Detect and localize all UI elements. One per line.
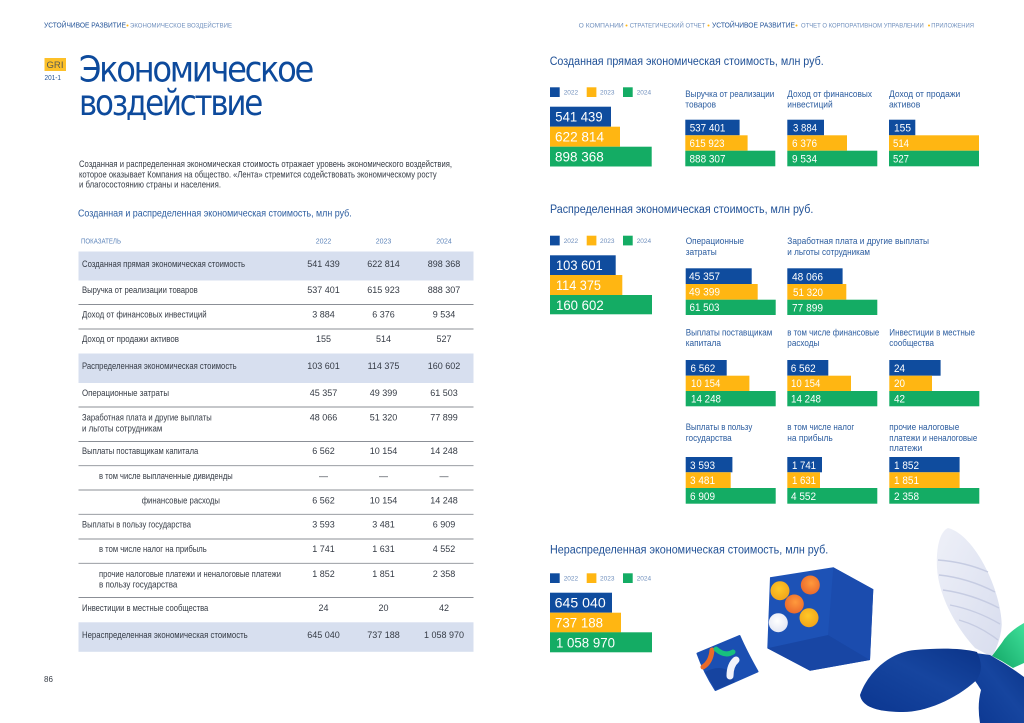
row: financial costs: 10 154 — [370, 496, 397, 506]
bar chart: community investment — [889, 328, 979, 406]
bar chart: revenue — [685, 89, 775, 166]
bar chart: other taxes: платежи — [889, 443, 922, 453]
row: revenue — [78, 285, 474, 304]
row: financial costs: 14 248 — [430, 496, 458, 506]
table header: 2023 — [376, 238, 391, 246]
intro paragraph: которое оказывает Компания на общество. «Лента» стремится содействовать экономическому росту — [79, 169, 437, 179]
bar chart: profit tax: 1 741 — [792, 460, 816, 472]
bar chart: state payments: 3 481 — [690, 475, 715, 487]
intro paragraph: Созданная и распределенная экономическая стоимость отражает уровень экономического воздействия, — [79, 159, 452, 169]
legend: retained value: 2023 — [600, 576, 615, 582]
bar chart: capital providers: Выплаты поставщикам — [686, 328, 772, 338]
bar chart: other taxes: 1 852 — [894, 460, 919, 472]
row: distributed value: Распределенная экономическая стоимость — [82, 361, 237, 371]
bar chart: direct value total: 622 814 — [555, 129, 604, 145]
page number: 86 — [44, 675, 53, 684]
row: asset sales — [82, 334, 452, 344]
bar chart: retained total: 645 040 — [555, 594, 606, 610]
right navigation: СТРАТЕГИЧЕСКИЙ ОТЧЕТ — [630, 20, 705, 30]
row: wages: 51 320 — [370, 413, 397, 423]
bar chart: community investment: 24 — [894, 363, 905, 375]
bar chart: other taxes: 2 358 — [894, 491, 919, 503]
row: revenue: Выручка от реализации товаров — [82, 285, 198, 295]
illustration: large cube with balls — [767, 567, 873, 671]
section heading: direct value: Созданная прямая экономическая стоимость, млн руб. — [550, 56, 824, 68]
row: financial income — [78, 310, 474, 329]
row: other taxes: 1 852 — [312, 569, 335, 579]
row: financial costs: финансовые расходы — [142, 496, 220, 506]
bar chart: financial costs: 6 562 — [791, 363, 816, 375]
bar chart: community investment: 42 — [894, 394, 905, 406]
row: dividends: — — [379, 471, 388, 481]
row: operating costs: Операционные затраты — [82, 388, 169, 398]
legend: retained value: 2022 — [564, 576, 579, 582]
row: dividends: — — [440, 471, 448, 481]
left breadcrumb — [44, 20, 233, 30]
row: community investment — [82, 603, 449, 613]
bar chart: financial costs — [787, 328, 879, 406]
row: dividends: в том числе выплаченные дивиденды — [99, 471, 233, 481]
row: asset sales: 155 — [316, 334, 331, 344]
row: community investment: Инвестиции в местные сообщества — [82, 603, 208, 613]
GRI badge — [44, 58, 66, 82]
bar chart: operating costs: 61 503 — [690, 302, 720, 314]
row: revenue: 537 401 — [307, 285, 340, 295]
row: profit tax: 4 552 — [433, 544, 455, 554]
row: retained value: 1 058 970 — [424, 630, 464, 640]
row: community investment: 20 — [378, 603, 389, 613]
row: wages — [78, 413, 474, 442]
bar chart: capital providers — [686, 328, 776, 406]
table — [78, 238, 474, 652]
table header — [81, 238, 452, 246]
bar chart: financial costs: расходы — [787, 338, 819, 348]
row: profit tax: в том числе налог на прибыль — [99, 544, 207, 554]
bar chart: state payments: государства — [686, 433, 732, 443]
row: financial income: 3 884 — [312, 310, 335, 320]
legend: retained value — [550, 573, 652, 583]
bar chart: asset sales: Доход от продажи — [889, 89, 960, 99]
bar chart: operating costs: 45 357 — [689, 271, 720, 283]
intro paragraph: и благосостоянию страны и населения. — [79, 179, 221, 189]
balls — [769, 576, 820, 632]
bar chart: financial income — [787, 89, 877, 166]
row: wages: и льготы сотрудникам — [82, 424, 162, 434]
GRI badge: GRI — [46, 60, 64, 71]
title: воздействие — [79, 83, 262, 124]
row: direct value: Созданная прямая экономическая стоимость — [82, 259, 245, 269]
row: revenue: 615 923 — [367, 285, 400, 295]
bar chart: financial income: Доход от финансовых — [787, 89, 872, 99]
row: operating costs: 61 503 — [430, 388, 458, 398]
bar chart: asset sales: 155 — [894, 122, 911, 134]
bar chart: asset sales: активов — [889, 99, 920, 109]
bar chart: state payments — [686, 422, 776, 504]
blue petal right — [968, 652, 1024, 723]
row: financial income: 9 534 — [433, 310, 455, 320]
bar chart: community investment: Инвестиции в местные — [889, 328, 975, 338]
bar chart: profit tax — [787, 422, 877, 504]
bar chart: capital providers: 6 562 — [690, 363, 715, 375]
row: distributed value: 114 375 — [368, 361, 399, 371]
row: asset sales: 527 — [436, 334, 452, 344]
row: other taxes: 2 358 — [433, 569, 455, 579]
bar chart: financial costs: 10 154 — [791, 378, 820, 390]
row: financial costs — [78, 496, 474, 514]
bar chart: asset sales: 514 — [893, 138, 909, 150]
legend: direct value — [550, 87, 652, 97]
bar chart: wages: 77 899 — [792, 303, 823, 315]
table heading: Созданная и распределенная экономическая стоимость, млн руб. — [78, 208, 352, 220]
bar chart: state payments: 6 909 — [690, 491, 715, 503]
row: state payments: 3 481 — [372, 520, 395, 530]
table header: 2022 — [316, 238, 331, 246]
row: state payments: 3 593 — [312, 520, 335, 530]
row: dividends — [78, 471, 474, 490]
row: financial costs: 6 562 — [312, 496, 335, 506]
row: direct value: 541 439 — [307, 259, 340, 269]
legend: distributed value: 2023 — [600, 238, 615, 245]
bar chart: financial income: 3 884 — [793, 122, 817, 134]
bar chart: operating costs: 49 399 — [689, 287, 720, 299]
row: other taxes — [78, 569, 474, 598]
bar chart: distributed total: 160 602 — [556, 297, 604, 313]
bar chart: wages: и льготы сотрудникам — [787, 247, 870, 257]
row: operating costs: 45 357 — [310, 388, 337, 398]
bar chart: wages: 48 066 — [792, 272, 823, 284]
row: other taxes: 1 851 — [372, 569, 395, 579]
row: distributed value: 160 602 — [428, 361, 460, 371]
row: asset sales: Доход от продажи активов — [82, 334, 179, 344]
row: state payments — [78, 520, 474, 539]
bar chart: other taxes: прочие налоговые — [889, 422, 959, 432]
bar chart: retained total: 1 058 970 — [556, 634, 615, 650]
bar chart: financial income: инвестиций — [787, 99, 833, 109]
row: state payments: Выплаты в пользу государства — [82, 520, 191, 530]
bar chart: state payments: 3 593 — [690, 460, 715, 472]
bar chart: operating costs: затраты — [686, 247, 717, 257]
blue petal left — [860, 649, 981, 712]
table header: ПОКАЗАТЕЛЬ — [81, 238, 121, 246]
right navigation — [579, 20, 974, 30]
bar chart: community investment: сообщества — [889, 338, 934, 348]
row: capital providers — [78, 446, 474, 466]
intro paragraph — [79, 159, 452, 189]
row: operating costs — [78, 388, 474, 407]
legend: direct value: 2024 — [637, 90, 652, 96]
left breadcrumb: ЭКОНОМИЧЕСКОЕ ВОЗДЕЙСТВИЕ — [130, 20, 233, 30]
bar chart: asset sales — [889, 89, 979, 166]
GRI badge: 201-1 — [44, 75, 61, 82]
bar chart: capital providers: капитала — [686, 338, 721, 348]
row: direct value: 622 814 — [367, 259, 400, 269]
row: other taxes: прочие налоговые платежи и неналоговые платежи — [99, 569, 281, 579]
bar chart: capital providers: 14 248 — [691, 394, 721, 406]
title: Экономическое — [79, 50, 313, 90]
section heading: distributed value: Распределенная экономическая стоимость, млн руб. — [550, 204, 813, 216]
bar chart: revenue: 888 307 — [690, 153, 726, 165]
bar chart: operating costs — [686, 236, 776, 315]
bar chart: profit tax: 4 552 — [791, 491, 816, 503]
table header: 2024 — [436, 238, 452, 246]
legend: retained value: 2024 — [637, 576, 652, 582]
bar chart: profit tax: 1 631 — [792, 475, 816, 487]
row: profit tax — [78, 544, 474, 563]
bar chart: financial income: 6 376 — [792, 138, 817, 150]
bar chart: asset sales: 527 — [893, 153, 909, 165]
bar chart: distributed total — [550, 255, 652, 314]
bar chart: revenue: 537 401 — [690, 122, 725, 134]
right navigation: ОТЧЕТ О КОРПОРАТИВНОМ УПРАВЛЕНИИ — [801, 22, 924, 30]
bar chart: revenue: товаров — [685, 99, 716, 109]
bar chart: direct value total — [550, 107, 652, 166]
right navigation: УСТОЙЧИВОЕ РАЗВИТИЕ — [712, 20, 795, 30]
bar chart: other taxes: 1 851 — [894, 475, 919, 487]
bar chart: wages — [787, 236, 929, 315]
bar chart: community investment: 20 — [894, 378, 905, 390]
bar chart: profit tax: на прибыль — [787, 433, 833, 443]
row: community investment: 24 — [318, 603, 329, 613]
legend: direct value: 2022 — [564, 90, 579, 96]
row: asset sales: 514 — [376, 334, 391, 344]
bar chart: financial income: 9 534 — [792, 153, 817, 165]
legend: distributed value — [550, 236, 652, 245]
bar chart: wages: 51 320 — [793, 287, 823, 299]
right navigation: О КОМПАНИИ — [579, 22, 624, 30]
row: retained value: 645 040 — [307, 630, 340, 640]
row: retained value: 737 188 — [367, 630, 400, 640]
row: distributed value: 103 601 — [307, 361, 340, 371]
row: profit tax: 1 631 — [372, 544, 395, 554]
row: operating costs: 49 399 — [370, 388, 397, 398]
row: retained value: Нераспределенная экономическая стоимость — [82, 630, 248, 640]
row: wages: Заработная плата и другие выплаты — [82, 413, 212, 423]
legend: direct value: 2023 — [600, 90, 615, 96]
title — [79, 50, 313, 124]
legend: distributed value: 2022 — [564, 238, 579, 245]
bar chart: direct value total: 898 368 — [555, 148, 604, 164]
row: financial income: Доход от финансовых инвестиций — [82, 310, 207, 320]
row: direct value: 898 368 — [428, 259, 460, 269]
section heading: retained value: Нераспределенная экономическая стоимость, млн руб. — [550, 544, 828, 556]
right navigation: ПРИЛОЖЕНИЯ — [931, 22, 974, 30]
bar chart: distributed total: 103 601 — [556, 257, 603, 273]
row: community investment: 42 — [439, 603, 449, 613]
bar chart: revenue: 615 923 — [690, 138, 724, 150]
bar chart: state payments: Выплаты в пользу — [686, 422, 753, 432]
illustration: balloon flower — [860, 528, 1024, 723]
bar chart: direct value total: 541 439 — [555, 109, 603, 125]
bar chart: financial costs: 14 248 — [791, 394, 821, 406]
row: capital providers: 6 562 — [312, 446, 335, 456]
row: capital providers: Выплаты поставщикам капитала — [82, 446, 198, 456]
green petal — [992, 623, 1024, 668]
row: profit tax: 1 741 — [312, 544, 335, 554]
row: direct value — [78, 252, 474, 280]
row: state payments: 6 909 — [433, 520, 455, 530]
bar chart: capital providers: 10 154 — [691, 378, 720, 390]
row: wages: 48 066 — [310, 413, 337, 423]
bar chart: financial costs: в том числе финансовые — [787, 328, 879, 338]
bar chart: other taxes — [889, 422, 979, 504]
row: distributed value — [78, 354, 474, 383]
row: financial income: 6 376 — [372, 310, 395, 320]
legend: distributed value: 2024 — [637, 238, 652, 245]
illustration: small cube — [698, 636, 758, 690]
bar chart: distributed total: 114 375 — [556, 277, 601, 293]
bar chart: profit tax: в том числе налог — [787, 422, 855, 432]
bar chart: wages: Заработная плата и другие выплаты — [787, 236, 929, 246]
row: wages: 77 899 — [430, 413, 458, 423]
bar chart: revenue: Выручка от реализации — [685, 89, 774, 99]
row: retained value — [78, 622, 474, 652]
row: capital providers: 14 248 — [430, 446, 458, 456]
row: capital providers: 10 154 — [370, 446, 397, 456]
row: other taxes: в пользу государства — [99, 580, 177, 590]
bar chart: operating costs: Операционные — [686, 236, 744, 246]
bar chart: retained total — [550, 593, 652, 652]
bar chart: other taxes: платежи и неналоговые — [889, 433, 977, 443]
left breadcrumb: УСТОЙЧИВОЕ РАЗВИТИЕ — [44, 20, 126, 30]
white petal — [937, 528, 1002, 657]
bar chart: retained total: 737 188 — [555, 614, 603, 630]
row: dividends: — — [319, 471, 328, 481]
row: revenue: 888 307 — [428, 285, 460, 295]
